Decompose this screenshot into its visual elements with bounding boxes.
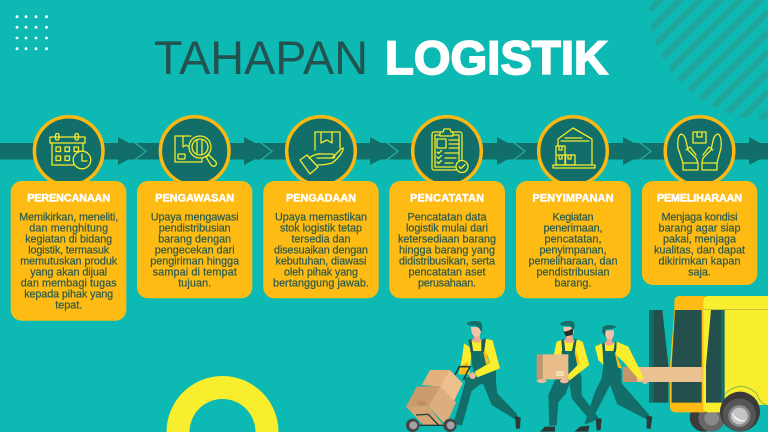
text block: pencatatan: ketersediaan barang — [398, 234, 496, 246]
text block: pencatatan: logistik mulai dari — [406, 222, 488, 234]
text block: penyimpanan: pendistribusian — [536, 266, 610, 278]
text block: pencatatan — [398, 212, 496, 290]
illustration: long box carried into truck — [623, 367, 702, 382]
text block: pengawasan: sampai di tempat — [153, 266, 237, 278]
text block: perencanaan: dan menghitung — [29, 222, 108, 234]
text block: perencanaan: kegiatan di bidang — [25, 234, 112, 246]
icon circle: pengawasan box and magnifier — [160, 117, 229, 185]
text block: perencanaan — [19, 212, 118, 312]
text block: pengawasan: pendistribusian — [159, 222, 231, 234]
text block: pencatatan: pencatatan aset — [408, 266, 486, 278]
text block: pengadaan: oleh pihak yang — [284, 266, 358, 278]
panel: pengadaan — [263, 181, 379, 298]
process arrow band — [0, 137, 768, 165]
icon circle: penyimpanan warehouse — [539, 117, 607, 185]
text block: pemeliharaan: dikirimkan kapan — [658, 256, 740, 268]
heading: pengadaan: PENGADAAN — [286, 192, 356, 204]
text block: pengadaan: kebutuhan, diawasi — [276, 256, 366, 268]
title: LOGISTIK — [385, 31, 608, 84]
text block: pengawasan: pengecekan dari — [155, 244, 235, 256]
text block: penyimpanan: Kegiatan — [552, 212, 594, 224]
text block: pemeliharaan: kualitas, dan dapat — [654, 244, 745, 256]
text block: pengawasan: barang dengan — [158, 234, 231, 246]
text block: perencanaan: memutuskan produk — [20, 256, 118, 268]
text block: pencatatan: hingga barang yang — [399, 244, 495, 256]
decorative yellow ring — [166, 376, 278, 432]
heading: pencatatan: PENCATATAN — [410, 192, 484, 204]
text block: pengadaan: Upaya memastikan — [275, 212, 367, 224]
text block: perencanaan: tepat. — [55, 300, 82, 312]
illustration: delivery truck — [649, 296, 768, 432]
icon circle: perencanaan calendar — [34, 117, 103, 185]
heading: pengawasan: PENGAWASAN — [155, 192, 234, 204]
heading: pemeliharaan: PEMELIHARAAN — [657, 192, 742, 204]
title: TAHAPAN — [154, 31, 368, 84]
text block: pencatatan: perusahaan. — [418, 278, 476, 290]
text block: penyimpanan: penerimaan, — [544, 222, 602, 234]
text block: pemeliharaan: barang agar siap — [658, 222, 740, 234]
text block: penyimpanan: pemeliharaan, dan — [528, 256, 618, 268]
icon circle: pemeliharaan hands with box — [665, 117, 734, 185]
text block: perencanaan: dan membagi tugas — [21, 278, 117, 290]
text block: penyimpanan — [528, 212, 618, 290]
text block: pemeliharaan — [654, 212, 745, 278]
text block: penyimpanan: pencatatan, — [544, 234, 602, 246]
panel: pencatatan — [389, 181, 505, 298]
heading: perencanaan: PERENCANAAN — [27, 192, 110, 204]
text block: penyimpanan: penyimpanan, — [540, 244, 606, 256]
text block: pengadaan: tersedia dan — [292, 234, 350, 246]
text block: pengadaan: disesuaikan dengan — [274, 244, 368, 256]
panel: pemeliharaan — [642, 181, 757, 285]
icon circle: pengadaan hand with box — [287, 117, 355, 185]
text block: perencanaan: Memikirkan, meneliti, — [19, 212, 118, 224]
text block: perencanaan: yang akan dijual — [30, 266, 107, 278]
panel: perencanaan — [11, 181, 126, 321]
text block: pengawasan — [150, 212, 239, 290]
icon circle: pencatatan clipboard — [413, 117, 481, 185]
text block: perencanaan: logistik, termasuk — [28, 244, 110, 256]
text block: pengadaan: bertanggung jawab. — [273, 278, 369, 290]
text block: pemeliharaan: pakai, menjaga — [663, 234, 736, 246]
text block: pemeliharaan: saja. — [688, 266, 711, 278]
illustration: worker pushing trolley — [406, 321, 521, 432]
decorative hatched quarter circle — [640, 0, 768, 120]
panel: penyimpanan — [516, 181, 631, 298]
text block: pencatatan: didistribusikan, serta — [399, 256, 495, 268]
text block: pencatatan: Pencatatan data — [408, 212, 486, 224]
text block: penyimpanan: barang. — [554, 278, 592, 290]
title — [154, 31, 608, 84]
text block: pengadaan: stok logistik tetap — [280, 222, 362, 234]
text block: perencanaan: kepada pihak yang — [24, 288, 113, 300]
decorative dot grid — [16, 15, 48, 50]
illustration: worker with box and beard — [537, 321, 602, 432]
illustration: worker carrying long box — [574, 325, 652, 432]
text block: pengawasan: pengiriman hingga — [150, 256, 239, 268]
text block: pengadaan — [273, 212, 369, 290]
text block: pengawasan: Upaya mengawasi — [151, 212, 239, 224]
heading: penyimpanan: PENYIMPANAN — [532, 192, 614, 204]
text block: pemeliharaan: Menjaga kondisi — [662, 212, 738, 224]
text block: pengawasan: tujuan. — [178, 278, 211, 290]
panel: pengawasan — [137, 181, 252, 298]
